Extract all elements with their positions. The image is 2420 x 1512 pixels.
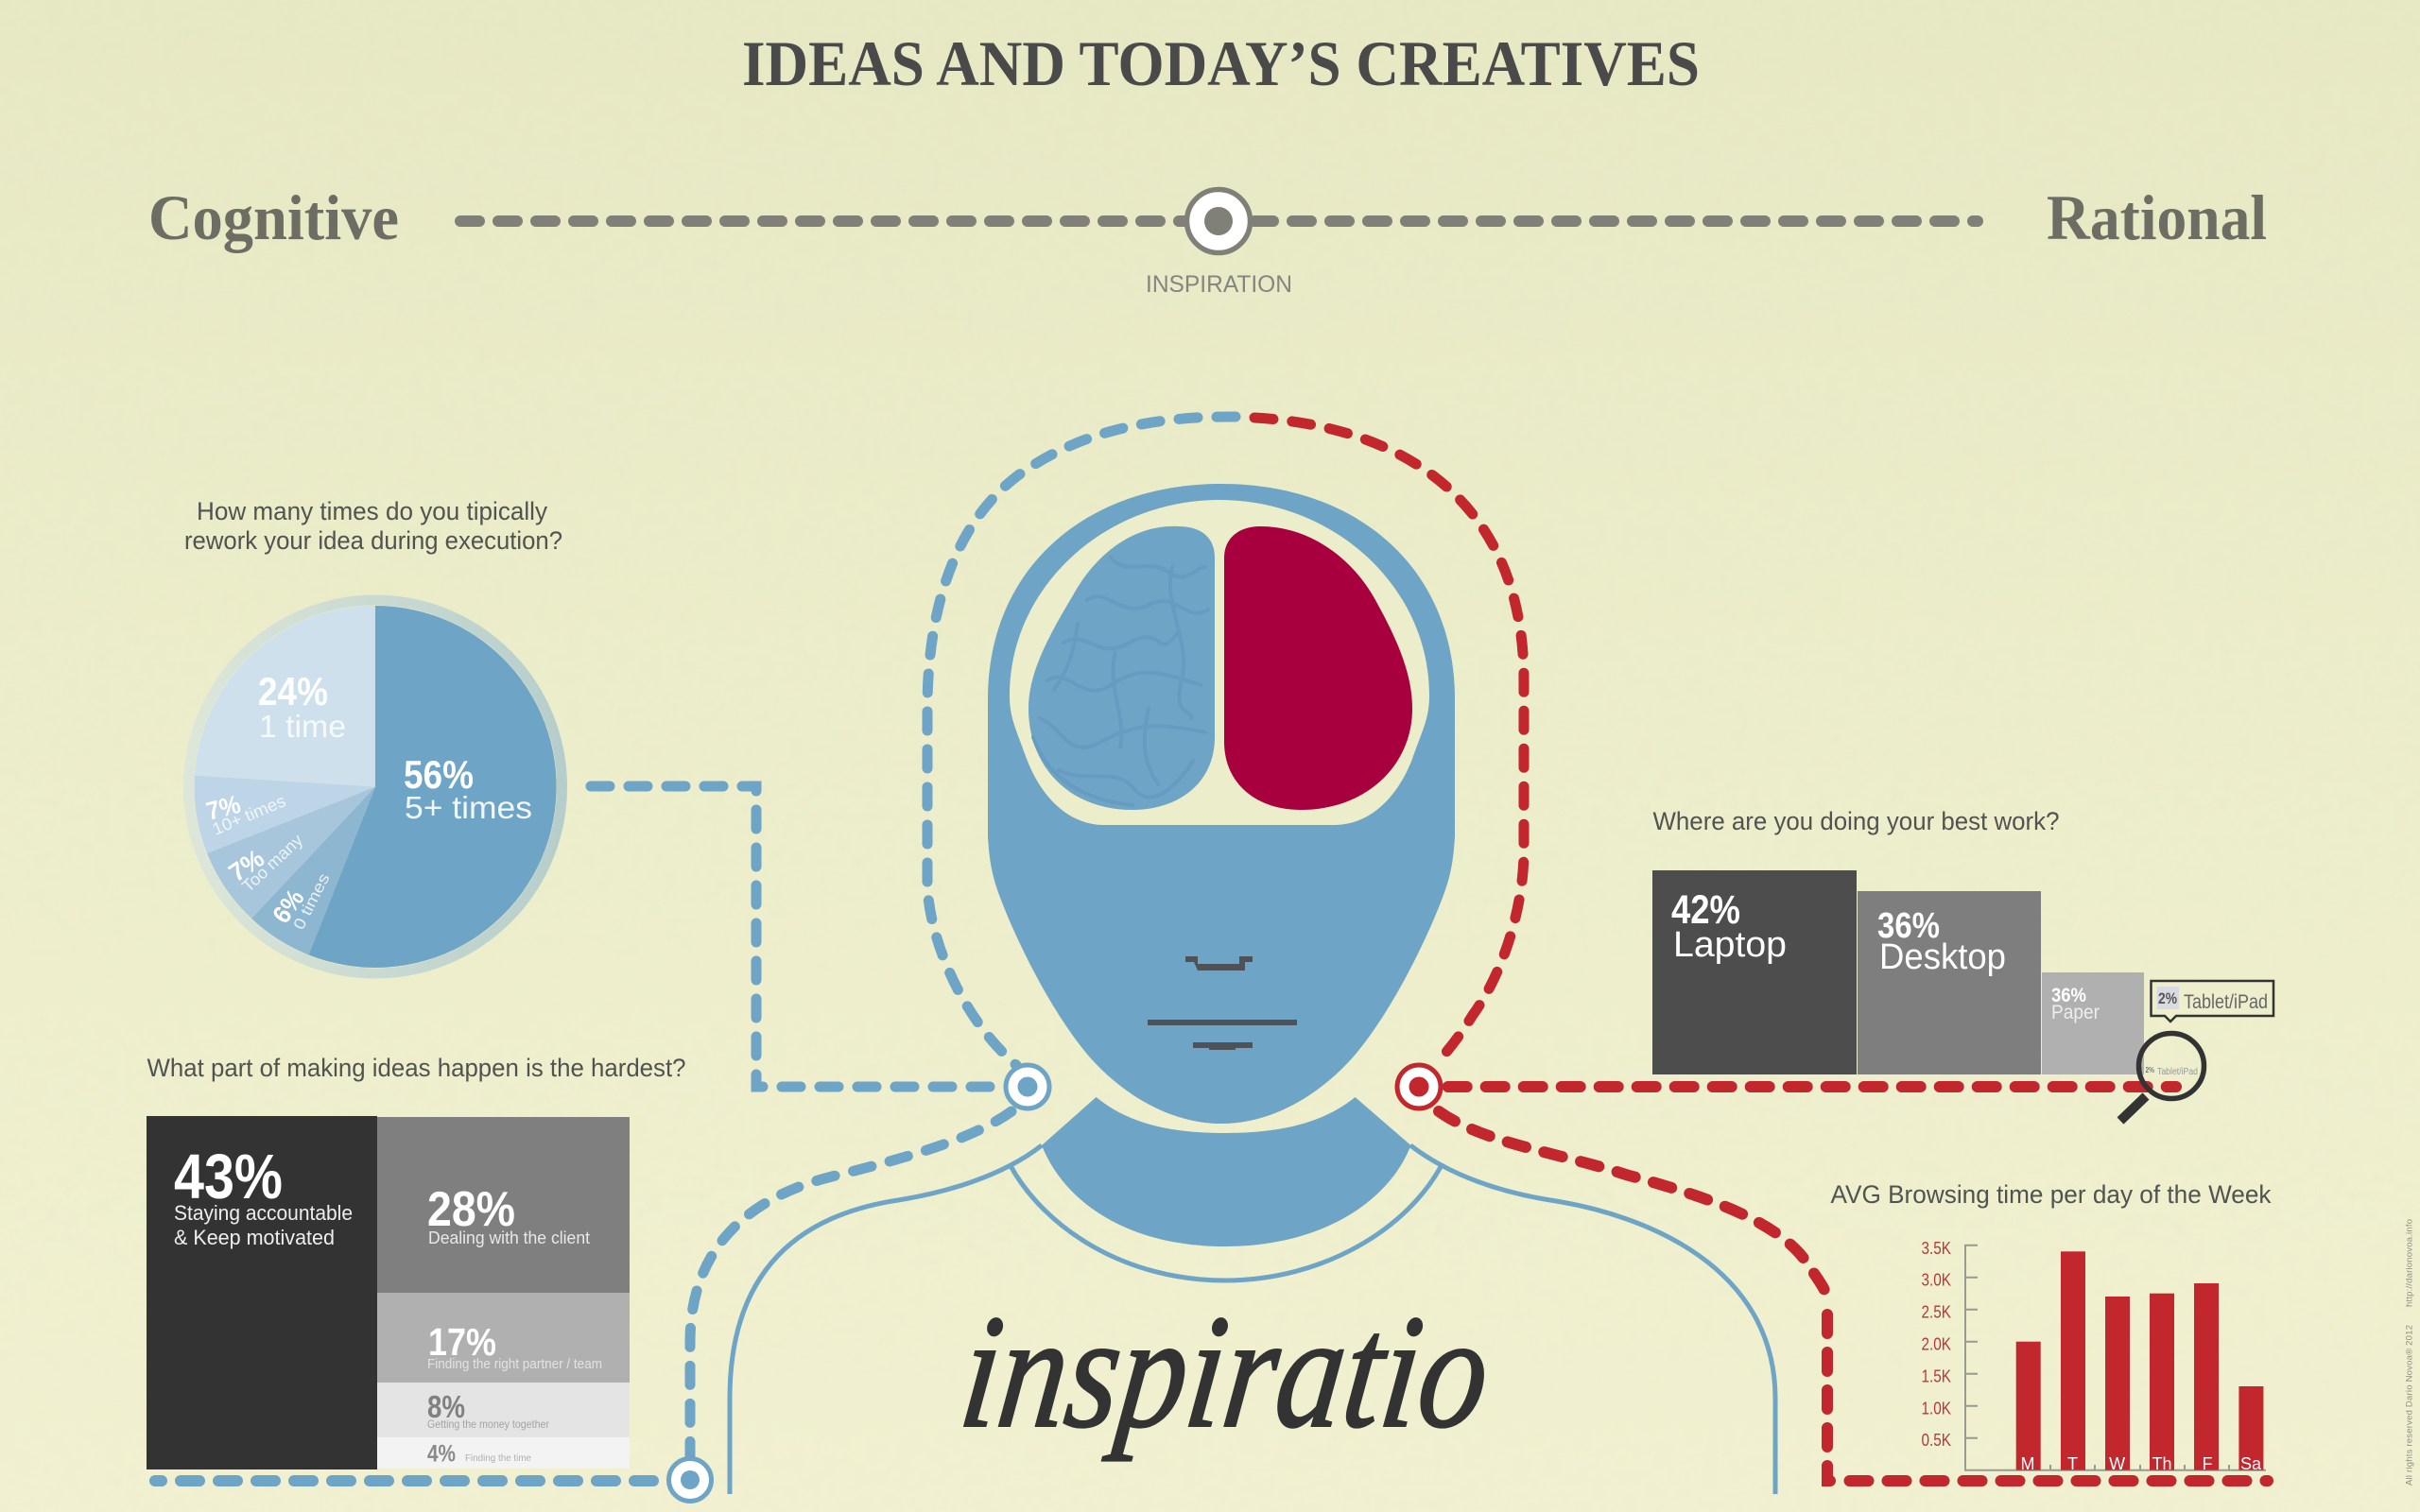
panel: rework pie chart	[184, 497, 562, 973]
slice label: 24%: 24%	[258, 669, 328, 713]
question heading: How many times do you tipically	[197, 497, 547, 525]
pie ring	[189, 600, 562, 973]
block: desktop: Desktop	[1879, 937, 2006, 977]
y axis labels	[1921, 1239, 1951, 1450]
brain: right hemisphere	[1224, 526, 1412, 810]
block: 8% getting the money: Getting the money together	[427, 1418, 549, 1431]
figure: neck	[1042, 1097, 1410, 1246]
block: laptop	[1652, 870, 1857, 1074]
day labels: Th	[2152, 1454, 2172, 1473]
block: 8% getting the money	[377, 1383, 630, 1437]
block: laptop: 42%	[1671, 887, 1740, 933]
day labels: Sa	[2240, 1454, 2262, 1473]
path: red branch to browsing chart	[1439, 1111, 1826, 1297]
brain: left hemisphere	[1028, 526, 1215, 810]
label: rational: Rational	[2047, 181, 2267, 253]
callout: tablet	[2152, 981, 2273, 1022]
path: blue branch to shoulder	[690, 1111, 1011, 1460]
block: 17% finding partner	[377, 1293, 630, 1383]
skull cutout	[1010, 500, 1429, 825]
slice label: 7% too many: 7%	[224, 844, 269, 887]
credits: vertical text	[2405, 1219, 2414, 1486]
head silhouette	[988, 484, 1455, 1124]
slice label: 24%	[258, 669, 346, 744]
slice label: 56%: 56%	[404, 752, 474, 797]
heading: Where are you doing your best work?	[1652, 807, 2059, 835]
magnifier icon	[2120, 1034, 2204, 1121]
panel: best work blocks	[1448, 807, 2273, 1121]
question heading: rework your idea during execution?	[184, 526, 562, 555]
panel: browsing time bar chart	[1830, 1180, 2272, 1473]
block: 4% finding the time	[377, 1437, 630, 1469]
block: paper: 36%	[2051, 985, 2086, 1006]
face: lower lip	[1193, 1042, 1253, 1050]
magnifier icon: Tablet/iPad	[2157, 1067, 2198, 1077]
block: desktop	[1858, 891, 2041, 1074]
block: 43% staying accountable: 43%	[174, 1142, 283, 1212]
question heading	[184, 497, 562, 555]
title: IDEAS AND TODAY’S CREATIVES	[742, 27, 1700, 99]
block: 43% staying accountable	[147, 1116, 377, 1469]
bars	[2016, 1251, 2263, 1470]
block: 17% finding partner: Finding the right partner / team	[427, 1356, 602, 1372]
node: inspiration marker	[1187, 189, 1250, 253]
slice label: 6% 0 times: 0 times	[290, 870, 334, 933]
slice label: 6% 0 times: 6%	[267, 885, 310, 928]
day labels: M	[2021, 1454, 2034, 1473]
block: 28% dealing with the client	[377, 1117, 630, 1293]
magnifier icon: 2%	[2146, 1066, 2154, 1074]
y axis labels: 2.0K	[1921, 1334, 1951, 1353]
block: desktop: 36%	[1877, 906, 1940, 946]
node: red neck	[1397, 1065, 1441, 1108]
slice label: 7% too many: Too many	[238, 831, 306, 896]
credits: vertical text: All rights reserved Dario Novoa® 2012	[2405, 1325, 2414, 1486]
path: red baseline below chart	[1849, 1475, 2268, 1486]
label: inspiration: INSPIRATION	[1146, 271, 1292, 298]
y axis labels: 1.0K	[1921, 1399, 1951, 1418]
block: paper: Paper	[2051, 1002, 2100, 1023]
connector: treemap to shoulder node	[155, 1475, 662, 1486]
label: cognitive: Cognitive	[148, 181, 399, 253]
callout: tablet: Tablet/iPad	[2184, 991, 2268, 1013]
block: 43% staying accountable: & Keep motivated	[174, 1226, 335, 1249]
y axis labels: 0.5K	[1921, 1431, 1951, 1450]
axes	[1965, 1246, 2266, 1470]
block: 4% finding the time: Finding the time	[465, 1452, 531, 1464]
node: blue neck	[1006, 1065, 1049, 1108]
block: laptop: Laptop	[1673, 925, 1787, 965]
dashed scale line	[460, 215, 1978, 227]
block: 4% finding the time: 4%	[427, 1440, 456, 1467]
face: nose	[1185, 956, 1253, 971]
block: paper	[2042, 972, 2144, 1074]
y axis labels: 3.5K	[1921, 1239, 1951, 1258]
path: red loop around head	[1254, 418, 1524, 1065]
y axis labels: 1.5K	[1921, 1366, 1951, 1385]
path: blue loop around head	[927, 417, 1236, 1065]
face: mouth	[1148, 1020, 1297, 1025]
figure: shirt outline	[730, 1145, 1775, 1494]
slice label: 56%	[404, 752, 532, 825]
day labels: W	[2109, 1454, 2125, 1473]
slice label: 24%: 1 time	[259, 709, 346, 744]
heading: AVG Browsing time per day of the Week	[1830, 1180, 2272, 1209]
scale: cognitive to rational	[148, 181, 2267, 298]
callout: tablet: 2%	[2158, 989, 2177, 1007]
heading: What part of making ideas happen is the hardest?	[147, 1054, 686, 1082]
wordmark: inspiratio: inspiratio	[952, 1282, 1499, 1462]
connector: red node to blocks	[1448, 1081, 2176, 1092]
slice label: 56%: 5+ times	[405, 790, 532, 825]
pie slices	[195, 606, 557, 968]
block: 28% dealing with the client: 28%	[427, 1182, 515, 1237]
panel: hardest part treemap	[147, 1054, 686, 1469]
y axis labels: 2.5K	[1921, 1302, 1951, 1321]
block: 28% dealing with the client: Dealing with the client	[428, 1228, 590, 1247]
y axis labels: 3.0K	[1921, 1270, 1951, 1289]
block: 43% staying accountable: Staying accountable	[174, 1201, 353, 1225]
block: 8% getting the money: 8%	[427, 1389, 465, 1424]
credits: vertical text: http://darionovoa.info	[2405, 1219, 2414, 1307]
day labels	[2021, 1454, 2262, 1473]
path: red corner down to chart baseline	[1827, 1314, 1830, 1481]
slice label: 7% 10+ times: 10+ times	[210, 791, 288, 839]
day labels: F	[2203, 1454, 2212, 1473]
day labels: T	[2067, 1454, 2078, 1473]
connector: pie to head	[591, 786, 1004, 1087]
figure: head	[988, 484, 1455, 1124]
slice label: 6% 0 times	[267, 870, 334, 933]
block: 17% finding partner: 17%	[428, 1320, 496, 1364]
node: blue shoulder	[669, 1459, 711, 1501]
slice label: 7% 10+ times: 7%	[203, 790, 243, 826]
